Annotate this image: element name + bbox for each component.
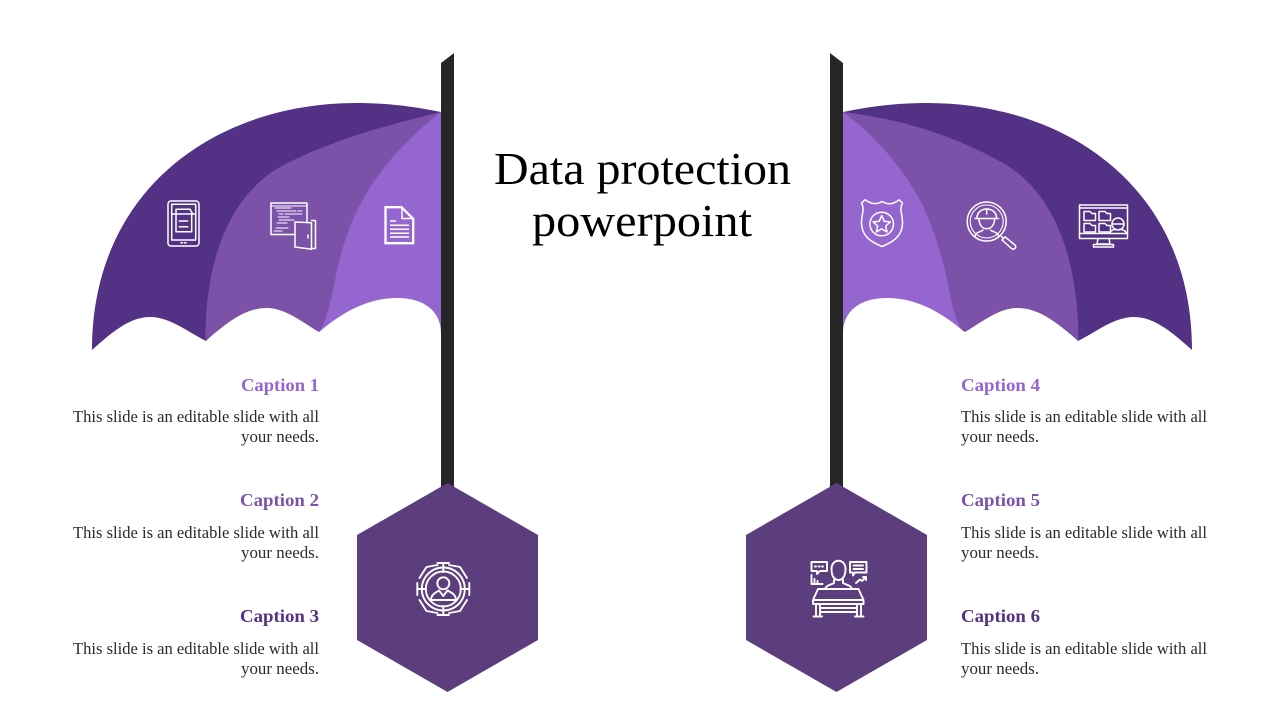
caption 4: your needs. <box>961 427 1039 446</box>
caption 2: Caption 2 <box>240 490 319 510</box>
right canopy dark panel <box>843 103 1192 350</box>
title: powerpoint <box>532 195 752 246</box>
title <box>494 143 791 246</box>
caption 3: This slide is an editable slide with all <box>73 639 319 658</box>
caption 6: your needs. <box>961 659 1039 678</box>
icon: target on person <box>417 563 469 615</box>
right canopy medium panel <box>843 112 1078 341</box>
left canopy light panel <box>319 112 441 333</box>
caption 1 <box>73 375 319 446</box>
caption 2: your needs. <box>241 543 319 562</box>
caption 4: This slide is an editable slide with all <box>961 407 1207 426</box>
icon: document <box>386 207 413 243</box>
caption 2 <box>73 490 319 562</box>
caption 6 <box>961 606 1207 678</box>
caption 1: Caption 1 <box>241 375 319 395</box>
icon: police badge <box>862 200 902 246</box>
caption 5: This slide is an editable slide with all <box>961 523 1207 542</box>
caption 4: Caption 4 <box>961 375 1040 395</box>
caption 5: Caption 5 <box>961 490 1040 510</box>
left umbrella <box>92 53 454 490</box>
left canopy medium panel <box>205 112 441 341</box>
caption 4 <box>961 375 1207 446</box>
caption 3 <box>73 606 319 678</box>
left canopy dark panel <box>92 103 441 350</box>
left hexagon <box>357 483 538 692</box>
icon: monitor with folders and intruder <box>1080 205 1128 247</box>
icon: person at desk with charts <box>812 561 866 616</box>
icon: magnifier with engineer <box>967 202 1016 249</box>
right umbrella pole <box>830 53 843 490</box>
caption 3: your needs. <box>241 659 319 678</box>
icon: tablet <box>168 201 199 246</box>
title: Data protection <box>494 143 791 194</box>
caption 3: Caption 3 <box>240 606 319 626</box>
caption 5 <box>961 490 1207 562</box>
caption 1: your needs. <box>241 427 319 446</box>
caption 2: This slide is an editable slide with all <box>73 523 319 542</box>
caption 1: This slide is an editable slide with all <box>73 407 319 426</box>
left umbrella pole <box>441 53 454 490</box>
right canopy light panel <box>843 112 964 333</box>
caption 6: This slide is an editable slide with all <box>961 639 1207 658</box>
caption 5: your needs. <box>961 543 1039 562</box>
right umbrella <box>830 53 1192 490</box>
caption 6: Caption 6 <box>961 606 1040 626</box>
icon: code window with door <box>271 203 316 249</box>
right hexagon <box>746 483 927 692</box>
